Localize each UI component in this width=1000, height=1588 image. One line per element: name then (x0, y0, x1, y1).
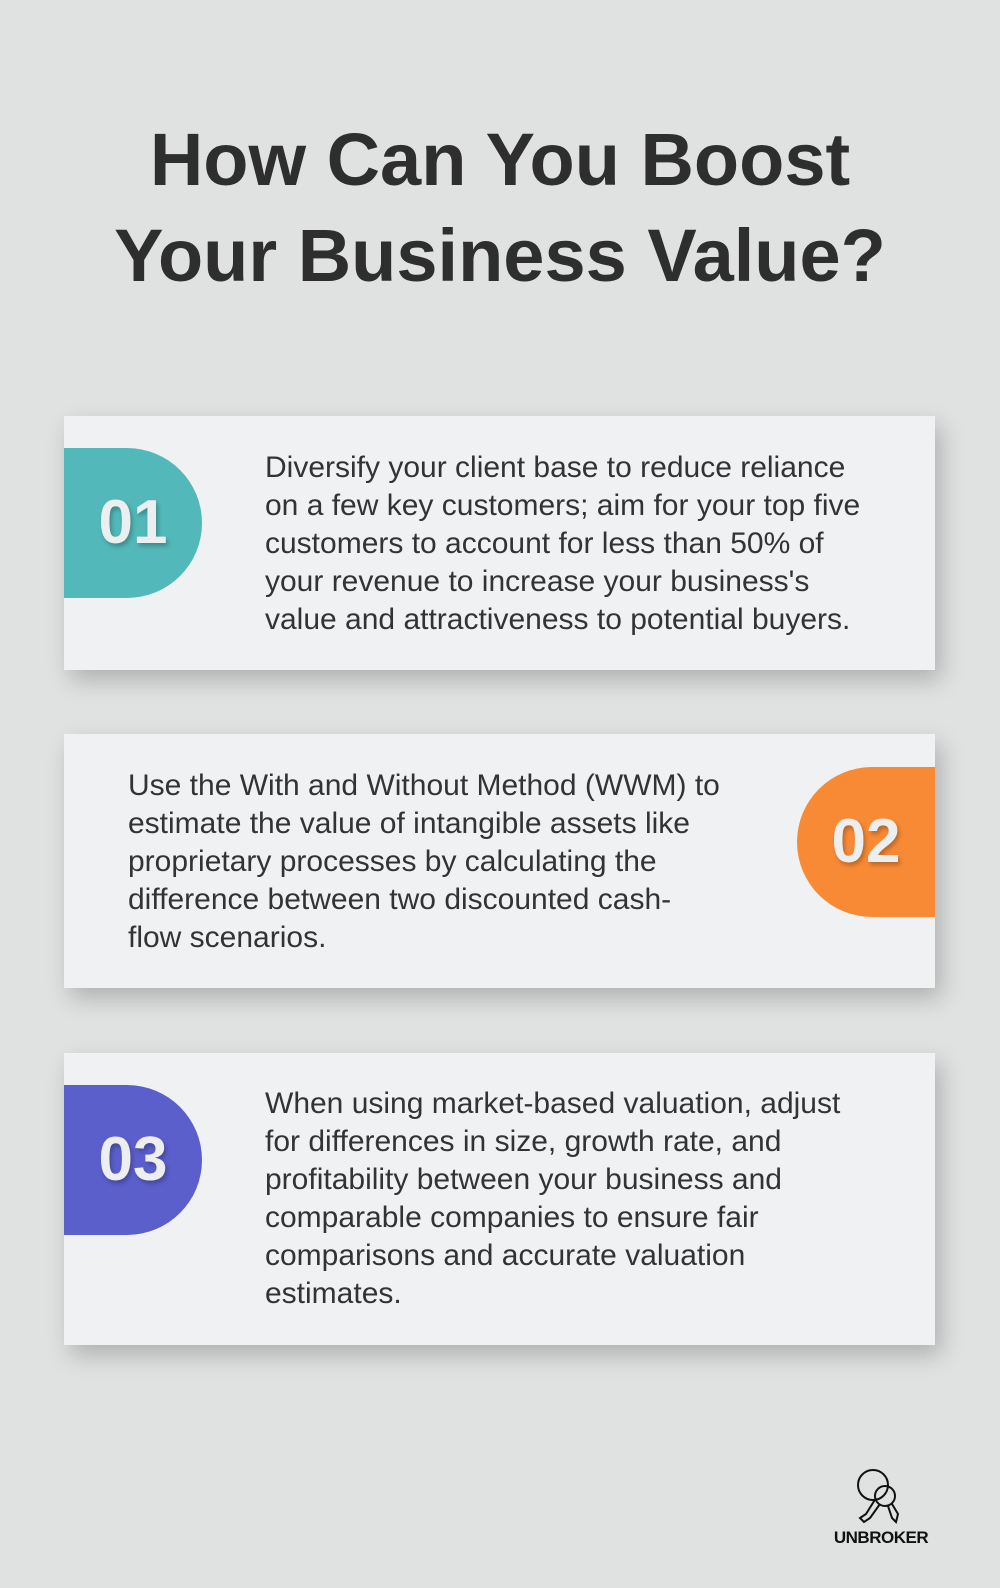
text block 2: estimate the value of intangible assets like (128, 807, 690, 840)
panel: card 2 (64, 734, 935, 988)
text block 1: value and attractiveness to potential buyers. (265, 603, 850, 636)
text block 1: customers to account for less than 50% of (265, 527, 824, 560)
text block 2 (128, 769, 720, 954)
text block 2: difference between two discounted cash- (128, 883, 671, 916)
title (114, 118, 886, 297)
text block 2: Use the With and Without Method (WWM) to (128, 769, 720, 802)
icon: keys (857, 1469, 900, 1524)
title: How Can You Boost (150, 118, 850, 201)
text block 3: estimates. (265, 1277, 402, 1310)
title: Your Business Value? (114, 214, 886, 297)
logo (834, 1469, 928, 1547)
text block 3: for differences in size, growth rate, and (265, 1125, 781, 1158)
text block 3: comparisons and accurate valuation (265, 1239, 745, 1272)
text block 1 (265, 451, 860, 636)
text block 3: profitability between your business and (265, 1163, 782, 1196)
badge 01 (64, 448, 202, 598)
text block 3 (265, 1087, 840, 1310)
logo text: UNBROKER (834, 1528, 928, 1547)
text block 1: on a few key customers; aim for your top five (265, 489, 860, 522)
panel: card 1 (64, 416, 935, 670)
panel: card 3 (64, 1053, 935, 1345)
badge 02: 02 (832, 807, 900, 876)
badge 03 (64, 1085, 202, 1235)
badge 01: 01 (99, 488, 167, 557)
text block 3: When using market-based valuation, adjust (265, 1087, 840, 1120)
badge 03: 03 (99, 1125, 167, 1194)
text block 1: Diversify your client base to reduce reliance (265, 451, 845, 484)
text block 2: proprietary processes by calculating the (128, 845, 657, 878)
text block 2: flow scenarios. (128, 921, 326, 954)
badge 02 (797, 767, 935, 917)
text block 1: your revenue to increase your business's (265, 565, 809, 598)
text block 3: comparable companies to ensure fair (265, 1201, 759, 1234)
